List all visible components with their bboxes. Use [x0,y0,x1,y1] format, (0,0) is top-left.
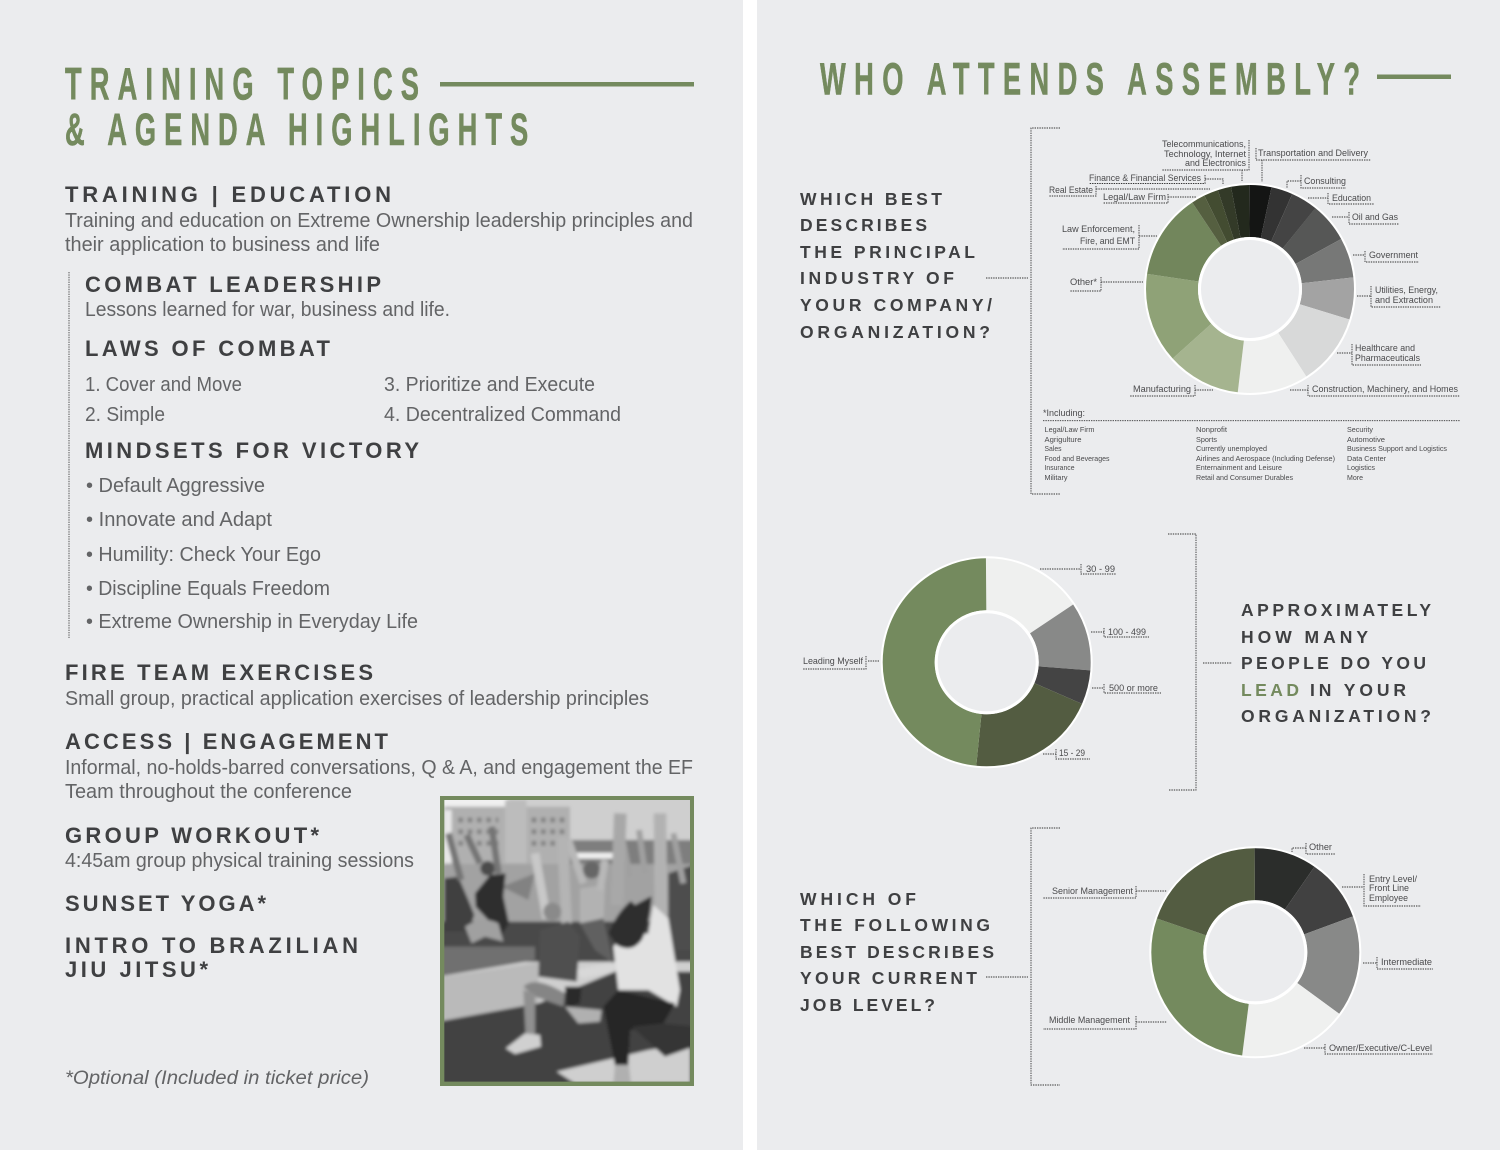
section: fire team exercises: FIRE TEAM EXERCISES [65,660,373,685]
section: training and education: TRAINING | EDUCATION [65,182,391,207]
question: how many people: IN YOUR [1310,680,1406,700]
labels: job level: Owner/Executive/C-Level [1329,1043,1432,1054]
labels: industry: Legal/Law Firm [1103,192,1166,203]
question: how many people [1241,600,1431,726]
middle person rear [580,885,605,923]
list: other industries included: Currently unemployed [1196,444,1267,453]
section: mindsets for victory [85,438,419,633]
labels: industry: Construction, Machinery, and Homes [1312,384,1458,395]
section: laws of combat [85,336,621,426]
panel: who attends assembly [757,0,1500,1150]
labels: industry [1049,139,1460,396]
title: who attends assembly: WHO ATTENDS ASSEMBLY? [820,53,1360,104]
section: combat leadership: Lessons learned for war, business and life. [85,299,450,321]
bracket: industry [986,128,1060,494]
question: principal industry: INDUSTRY OF [800,268,954,288]
list: other industries included: Agrigulture [1044,435,1082,444]
list: other industries included: Enternainment and Leisure [1196,463,1282,472]
question: principal industry: ORGANIZATION? [800,322,990,342]
section: combat leadership [85,272,450,321]
question: principal industry [800,189,992,342]
list: other industries included: Security [1347,425,1373,434]
section: mindsets for victory: • Extreme Ownership in Everyday Life [86,611,418,633]
list: other industries included: Sales [1044,444,1062,453]
left people [444,877,474,932]
list: other industries included: Business Support and Logistics [1347,444,1447,453]
donut chart: job level [1149,846,1361,1058]
labels: industry: Government [1369,250,1418,261]
list: other industries included: Sports [1196,435,1217,444]
bracket: job level [986,828,1060,1085]
center person [535,853,547,918]
list: other industries included: Airlines and Aerospace (Including Defense) [1196,454,1335,463]
question: principal industry: THE PRINCIPAL [800,242,975,262]
question: principal industry: DESCRIBES [800,215,927,235]
labels: industry: Technology, Internet [1164,149,1246,160]
list: other industries included: *Including: [1043,408,1085,419]
question: how many people: ORGANIZATION? [1241,706,1431,726]
labels: people led: 15 - 29 [1059,748,1085,759]
section: group workout [65,823,414,872]
labels: job level: Intermediate [1381,957,1432,968]
labels: industry: Pharmaceuticals [1355,353,1420,364]
list: other industries included: Nonprofit [1196,425,1228,434]
section: mindsets for victory: • Discipline Equals Freedom [86,578,330,600]
labels: job level: Entry Level/ [1369,874,1417,885]
labels: people led: 100 - 499 [1108,627,1146,638]
question: job level: JOB LEVEL? [800,995,935,1015]
question: how many people: LEAD [1241,680,1299,700]
labels: industry: Telecommunications, [1162,139,1246,150]
question: job level: BEST DESCRIBES [800,942,994,962]
title: training topics: & AGENDA HIGHLIGHTS [65,104,528,155]
labels: job level: Front Line [1369,883,1409,894]
labels: industry: Consulting [1304,176,1346,187]
section: access and engagement: Team throughout the conference [65,781,352,803]
section: combat leadership: COMBAT LEADERSHIP [85,272,381,297]
labels: industry: Healthcare and [1355,343,1415,354]
labels: industry: Utilities, Energy, [1375,285,1438,296]
section: access and engagement [65,729,693,803]
title: training topics: TRAINING TOPICS [65,58,419,109]
list: other industries included [1043,408,1460,482]
labels: industry: Real Estate [1049,185,1093,196]
list: other industries included: More [1347,473,1363,482]
labels: industry: Transportation and Delivery [1258,148,1368,159]
labels: industry: Other* [1070,277,1097,288]
right people [666,864,690,924]
panel: training topics [0,0,743,1150]
labels: people led: Leading Myself [803,656,863,667]
question: principal industry: WHICH BEST [800,189,942,209]
list: other industries included: Automotive [1347,435,1385,444]
section: mindsets for victory: • Humility: Check Your Ego [86,544,321,566]
labels: industry: Fire, and EMT [1080,236,1135,247]
labels: job level: Middle Management [1049,1015,1130,1026]
section: laws of combat: LAWS OF COMBAT [85,336,331,361]
labels: people led [803,564,1161,759]
question: job level: WHICH OF [800,889,916,909]
labels: industry: and Electronics [1185,158,1246,169]
labels: industry: Education [1332,193,1371,204]
section: intro to brazilian jiu jitsu: JIU JITSU* [65,957,208,982]
labels: industry: Manufacturing [1133,384,1191,395]
donut chart: industry [1144,183,1356,395]
section: mindsets for victory: MINDSETS FOR VICTORY [85,438,419,463]
section: laws of combat: 2. Simple [85,404,165,426]
list: other industries included: Food and Beverages [1044,454,1110,463]
section: intro to brazilian jiu jitsu: INTRO TO BRAZILIAN [65,933,358,958]
section: laws of combat: 4. Decentralized Command [384,404,621,426]
labels: job level [1043,842,1433,1054]
section: group workout: 4:45am group physical training sessions [65,850,414,872]
footnote: *Optional (Included in ticket price) [65,1068,369,1089]
section: training and education: Training and education on Extreme Ownership leadership principles and [65,210,693,232]
question: job level [800,889,994,1015]
section: mindsets for victory: • Default Aggressive [86,475,265,497]
labels: job level: Other [1309,842,1332,853]
section: mindsets for victory: • Innovate and Adapt [86,509,272,531]
labels: industry: Law Enforcement, [1062,224,1135,235]
question: job level: YOUR CURRENT [800,968,977,988]
question: job level: THE FOLLOWING [800,915,990,935]
section: fire team exercises: Small group, practical application exercises of leadership principles [65,688,649,710]
list: other industries included: Logistics [1347,463,1375,472]
list: other industries included: Military [1044,473,1068,482]
donut chart: people led [881,556,1093,768]
labels: job level: Senior Management [1052,886,1133,897]
labels: industry: Oil and Gas [1352,212,1398,223]
question: how many people: HOW MANY [1241,627,1368,647]
question: principal industry: YOUR COMPANY/ [800,295,992,315]
front person [617,813,620,905]
section: sunset yoga: SUNSET YOGA* [65,891,266,916]
section: training and education: their application to business and life [65,234,380,256]
section: training and education [65,182,693,256]
list: other industries included: Data Center [1347,454,1386,463]
labels: people led: 500 or more [1109,683,1158,694]
section: access and engagement: ACCESS | ENGAGEMENT [65,729,389,754]
list: other industries included: Insurance [1044,463,1074,472]
labels: job level: Employee [1369,893,1408,904]
list: other industries included: Retail and Consumer Durables [1196,473,1293,482]
bracket: people led [1168,534,1232,790]
photo: rooftop yoga group [438,793,698,1087]
labels: industry: Finance & Financial Services [1089,173,1201,184]
question: how many people: PEOPLE DO YOU [1241,653,1426,673]
title: training topics [65,58,694,155]
section: laws of combat: 3. Prioritize and Execute [384,374,595,396]
section: group workout: GROUP WORKOUT* [65,823,319,848]
list: other industries included: Legal/Law Firm [1044,425,1094,434]
section: fire team exercises [65,660,649,710]
section: laws of combat: 1. Cover and Move [85,374,242,396]
section: access and engagement: Informal, no-holds-barred conversations, Q & A, and engagement the EF [65,757,693,779]
question: how many people: APPROXIMATELY [1241,600,1431,620]
labels: industry: and Extraction [1375,295,1433,306]
section: intro to brazilian jiu jitsu [65,933,358,982]
labels: people led: 30 - 99 [1086,564,1115,575]
